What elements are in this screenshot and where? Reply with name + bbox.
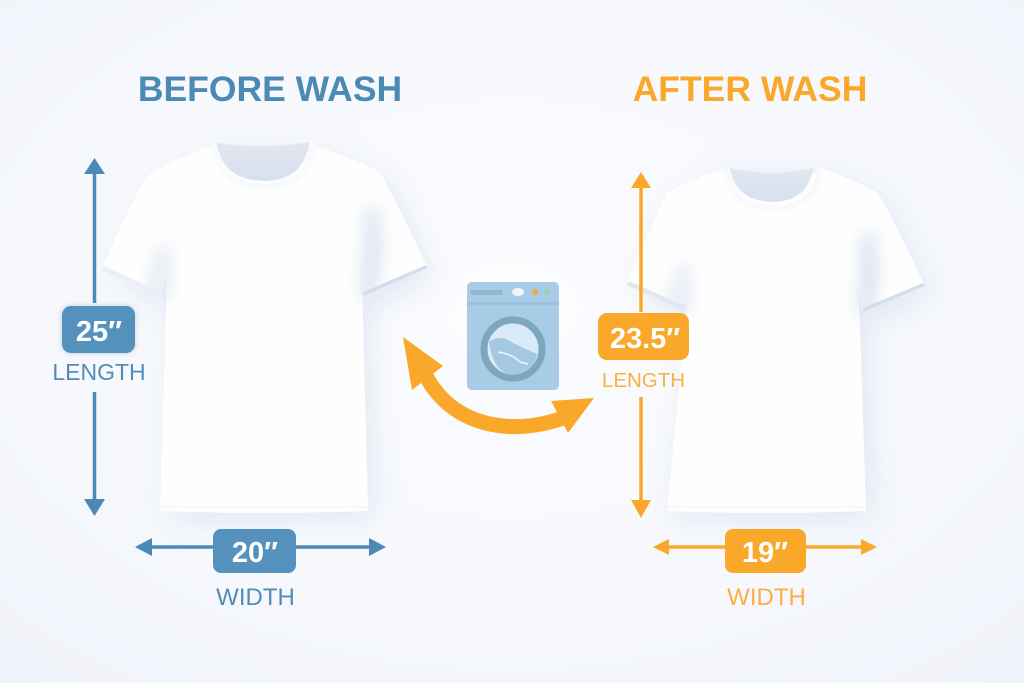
width label after: WIDTH [727,584,806,611]
length arrow after [631,172,651,518]
width badge after: 19″ [742,537,788,569]
t-shirt after wash [626,168,931,518]
width arrow before [135,538,386,556]
length badge after: 23.5″ [610,323,680,355]
width badge before [213,529,296,573]
length label after: LENGTH [602,369,685,392]
length arrow before [84,158,105,516]
width badge after [725,529,806,573]
length badge before [62,306,135,353]
heading: after wash: AFTER WASH [633,69,867,109]
width badge before: 20″ [232,537,278,569]
washing machine icon [467,282,559,390]
length label before: LENGTH [52,359,146,385]
t-shirt before wash [101,142,434,518]
length badge before: 25″ [76,316,122,348]
length badge after [598,313,689,360]
curved double arrow [403,337,594,433]
heading: before wash: BEFORE WASH [138,69,402,109]
width arrow after [653,539,877,555]
width label before: WIDTH [216,584,295,611]
